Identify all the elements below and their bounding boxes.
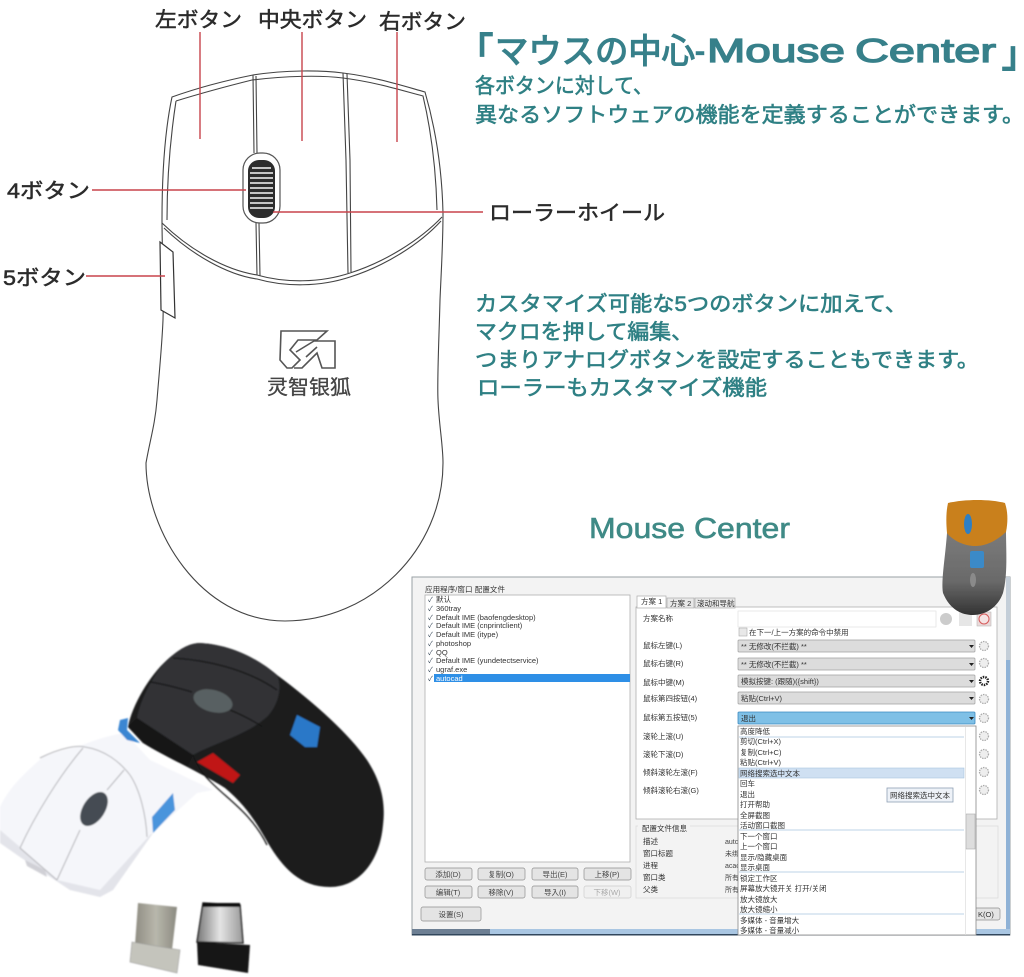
application list [425, 594, 630, 862]
window heading: 应用程序/窗口 配置文件 [425, 584, 506, 594]
photo: white mouse and black mouse [0, 643, 384, 897]
label: centre button: 中央ボタン [258, 9, 367, 32]
profile info: 所有 [725, 873, 739, 882]
list action buttons: 移除(V) [488, 887, 514, 897]
application list: ✓ [428, 631, 433, 639]
application list: Default IME (itype) [436, 630, 499, 639]
list action buttons: 下移(W) [593, 887, 621, 897]
application list: ✓ [428, 675, 433, 683]
title: 「 [458, 32, 493, 71]
dropdown list: 上一个窗口 [740, 841, 778, 851]
dropdown list: 锁定工作区 [740, 873, 778, 883]
profile info: 窗口类 [643, 872, 666, 882]
button divider lines [253, 73, 348, 275]
setting row labels: 鼠标第四按钮(4) [643, 693, 698, 703]
profile info: 配置文件信息 [642, 823, 687, 833]
application list: ✓ [428, 622, 433, 630]
dropdown list: 显示桌面 [740, 862, 770, 872]
dropdown list: 退出 [740, 789, 755, 799]
application list: 360tray [436, 604, 461, 613]
dropdown list: 屏幕放大镜开关 打开/关闭 [740, 883, 827, 893]
application list: ✓ [428, 666, 433, 674]
label: button 4: 4ボタン [7, 180, 90, 203]
tabs [636, 596, 997, 819]
profile info: 父类 [643, 884, 658, 894]
dropdown list: 放大镜放大 [740, 894, 778, 904]
label: right button: 右ボタン [379, 11, 466, 34]
dropdown list: 活动窗口截图 [740, 820, 785, 830]
setting row labels: 鼠标中键(M) [643, 677, 685, 687]
title: - [695, 32, 705, 69]
setting row labels: 倾斜滚轮左滚(F) [643, 767, 698, 777]
text block: customization: つまりアナログボタンを設定することもできます。 [475, 349, 979, 372]
application list: Default IME (baofengdesktop) [436, 613, 536, 622]
title [458, 32, 1024, 75]
dropdown list: 多媒体 - 音量减小 [740, 925, 800, 935]
application list: ✓ [428, 596, 433, 604]
tabs: 方案 1 [641, 596, 662, 606]
dropdown list: 复制(Ctrl+C) [740, 747, 782, 757]
application list: autocad [436, 674, 463, 683]
dropdown list: 显示/隐藏桌面 [740, 852, 788, 862]
black mouse [128, 643, 384, 887]
application list: ✓ [428, 640, 433, 648]
brand name: 灵智银狐 [267, 376, 351, 399]
profile info: auto [725, 839, 739, 846]
tooltip: 网络搜索选中文本 [890, 790, 950, 800]
setting row labels: 鼠标左键(L) [643, 640, 683, 650]
scroll wheel [243, 153, 280, 223]
name field and checkbox [738, 611, 991, 637]
dropdown list: 回车 [740, 778, 755, 788]
OK button [950, 908, 1000, 920]
setting row labels [643, 613, 699, 795]
list action buttons: 编辑(T) [436, 887, 461, 897]
heading: Mouse Center: Mouse Center [589, 513, 790, 545]
icon: small coloured mouse [942, 500, 1007, 615]
gear icons [980, 642, 988, 794]
combo boxes [738, 640, 975, 724]
text block: customization [475, 293, 979, 400]
inner button shell lines [176, 76, 437, 210]
profile info [636, 822, 998, 898]
dropdown list: 多媒体 - 音量增大 [740, 915, 800, 925]
profile info: 未绑 [725, 849, 739, 858]
profile info: 进程 [643, 861, 658, 870]
title: Center [855, 32, 996, 69]
combo boxes: 模拟按键: (跟随)({shift}) [741, 676, 819, 686]
list action buttons: 导入(I) [544, 888, 567, 897]
text block: customization: ローラーもカスタマイズ機能 [477, 377, 767, 400]
profile info: 描述 [643, 836, 658, 846]
dropdown list: 放大镜缩小 [740, 904, 778, 914]
dropdown list: 全屏截图 [740, 810, 770, 820]
OK button: K(O) [978, 910, 994, 919]
profile info: 所有 [725, 885, 739, 894]
application list: ugraf.exe [436, 665, 467, 674]
list action buttons: 设置(S) [438, 909, 464, 919]
white mouse [0, 718, 213, 897]
mouse body outline [146, 71, 443, 621]
title: マウスの中心 [495, 33, 695, 71]
profile info: acac [725, 863, 740, 870]
name field and checkbox: 在下一/上一方案的命令中禁用 [749, 627, 849, 637]
title: Mouse [707, 32, 845, 69]
application list: ✓ [428, 605, 433, 613]
application list: ✓ [428, 614, 433, 622]
application list: ✓ [428, 657, 433, 665]
combo boxes: 退出 [741, 713, 756, 723]
list action buttons [421, 868, 631, 921]
tabs: 滚动和导航 [697, 598, 735, 608]
application list: QQ [436, 648, 448, 657]
window frame [412, 577, 1010, 935]
setting row labels: 方案名称 [643, 613, 673, 623]
dropdown list [738, 726, 976, 935]
dropdown list: 下一个窗口 [740, 831, 778, 841]
setting row labels: 鼠标第五按钮(5) [643, 712, 698, 722]
list action buttons: 添加(D) [435, 869, 461, 879]
setting row labels: 倾斜滚轮右滚(G) [643, 785, 699, 795]
brand logo [280, 331, 335, 368]
label: scroll wheel: ローラーホイール [489, 202, 665, 225]
dropdown list: 网络搜索选中文本 [740, 768, 800, 778]
text block: intro: 異なるソフトウェアの機能を定義することができます。 [475, 104, 1024, 127]
application list: Default IME (yundetectservice) [436, 656, 539, 665]
combo boxes: 粘贴(Ctrl+V) [741, 693, 783, 703]
setting row labels: 鼠标右键(R) [643, 658, 684, 668]
tooltip [887, 788, 953, 802]
text block: customization: カスタマイズ可能な5つのボタンに加えて、 [475, 293, 907, 316]
red leader lines [86, 32, 483, 276]
text block: customization: マクロを押して編集、 [475, 321, 693, 344]
list action buttons: 复制(O) [488, 869, 514, 879]
combo boxes: ** 无修改(不拦截) ** [741, 641, 807, 651]
text block: intro: 各ボタンに対して、 [475, 75, 653, 98]
black dongle [197, 903, 250, 973]
dropdown list: 打开帮助 [740, 799, 770, 809]
side button 5 [160, 242, 175, 318]
application list: 默认 [436, 594, 451, 604]
setting row labels: 滚轮下滚(D) [643, 749, 684, 759]
list action buttons: 上移(P) [594, 869, 620, 879]
label: button 5: 5ボタン [3, 267, 86, 290]
diagram: mouse outline with button callouts [3, 9, 665, 621]
photo: USB dongles [130, 903, 250, 973]
silver dongle [130, 903, 180, 973]
dropdown list: 粘贴(Ctrl+V) [740, 757, 782, 767]
text block: intro [475, 75, 1024, 127]
software window screenshot [412, 577, 1010, 936]
list action buttons: 导出(E) [542, 869, 568, 879]
dropdown list: 剪切(Ctrl+X) [740, 736, 782, 746]
application list: ✓ [428, 649, 433, 657]
application list: Default IME (cnprintclient) [436, 621, 523, 630]
label: left button: 左ボタン [155, 9, 242, 32]
profile info: 窗口标题 [643, 848, 673, 858]
dropdown list: 高度降低 [740, 726, 770, 736]
setting row labels: 滚轮上滚(U) [643, 731, 684, 741]
combo boxes: ** 无修改(不拦截) ** [741, 659, 807, 669]
application list: photoshop [436, 639, 471, 648]
tabs: 方案 2 [670, 598, 691, 608]
